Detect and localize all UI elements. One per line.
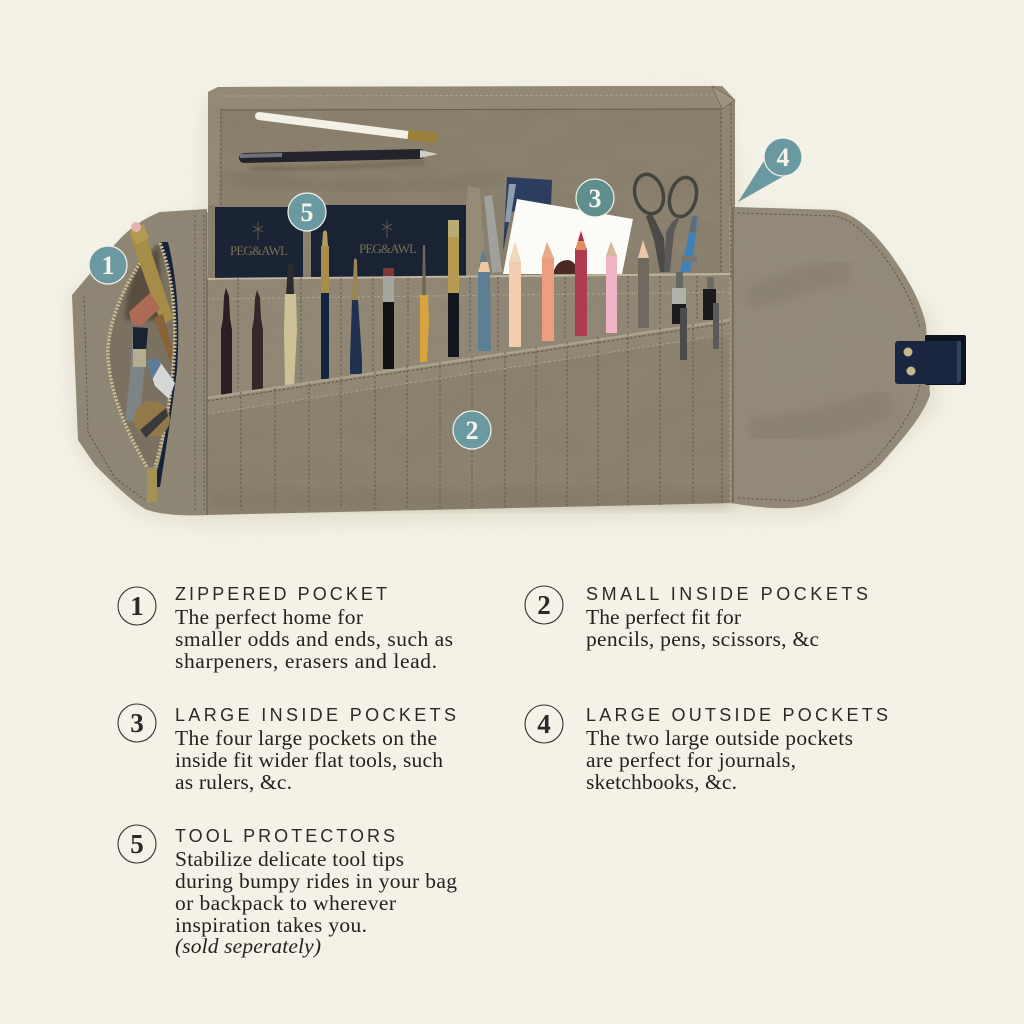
zipper pocket contents bbox=[125, 222, 175, 438]
legend item 2: small inside pockets: 2 bbox=[537, 590, 551, 620]
callout 2 bbox=[453, 411, 491, 449]
callout 2: 2 bbox=[466, 416, 478, 445]
legend item 4: large outside pockets: sketchbooks, &c. bbox=[586, 770, 737, 794]
legend item 4: large outside pockets bbox=[525, 705, 888, 794]
tool protectors bbox=[215, 205, 466, 282]
legend item 4: large outside pockets: The two large outside pockets bbox=[586, 726, 853, 750]
mechanical pencil clips over pocket bbox=[680, 303, 719, 360]
legend item 5: tool protectors: during bumpy rides in your bag bbox=[175, 869, 457, 893]
legend item 1: zippered pocket bbox=[118, 584, 453, 673]
pens on top panel bbox=[240, 116, 438, 169]
legend item 3: large inside pockets: The four large pockets on the bbox=[175, 726, 437, 750]
legend item 5: tool protectors: (sold seperately) bbox=[175, 934, 321, 958]
legend item 2: small inside pockets bbox=[525, 584, 868, 651]
legend item 3: large inside pockets: LARGE INSIDE POCKETS bbox=[175, 705, 456, 725]
legend item 3: large inside pockets bbox=[118, 704, 456, 794]
legend item 5: tool protectors: inspiration takes you. bbox=[175, 913, 367, 937]
legend item 1: zippered pocket: ZIPPERED POCKET bbox=[175, 584, 387, 604]
callout 4 with pointer bbox=[738, 138, 802, 202]
legend item 5: tool protectors: or backpack to wherever bbox=[175, 891, 396, 915]
roll shadow bbox=[72, 94, 936, 522]
left flap with zipper bbox=[65, 205, 210, 520]
mechanical pencils bbox=[672, 272, 716, 324]
legend item 2: small inside pockets: SMALL INSIDE POCKETS bbox=[586, 584, 868, 604]
ruler and card bbox=[484, 177, 633, 274]
top panel: large inside pockets bbox=[208, 85, 736, 292]
legend item 2: small inside pockets: The perfect fit for bbox=[586, 605, 741, 629]
legend item 5: tool protectors: TOOL PROTECTORS bbox=[175, 826, 395, 846]
small pocket back panel bbox=[208, 273, 731, 397]
tool protectors: PEG&AWL bbox=[230, 243, 288, 258]
pencils bbox=[478, 231, 649, 351]
scissors and blue pen bbox=[630, 171, 701, 272]
callout 3: 3 bbox=[588, 184, 602, 213]
legend item 2: small inside pockets: pencils, pens, scissors, &c bbox=[586, 627, 819, 651]
legend item 1: zippered pocket: 1 bbox=[130, 591, 144, 621]
legend item 4: large outside pockets: 4 bbox=[537, 709, 551, 739]
callout 1: 1 bbox=[102, 251, 114, 280]
callout 5: 5 bbox=[300, 198, 314, 227]
legend item 1: zippered pocket: smaller odds and ends, such as bbox=[175, 627, 453, 651]
legend item 3: large inside pockets: as rulers, &c. bbox=[175, 770, 292, 794]
tool roll illustration bbox=[65, 80, 966, 522]
lower pockets: small inside pockets front bbox=[200, 315, 740, 520]
leather strap and rivets bbox=[895, 335, 966, 385]
legend item 1: zippered pocket: The perfect home for bbox=[175, 605, 363, 629]
legend item 4: large outside pockets: are perfect for journals, bbox=[586, 748, 796, 772]
zipper pocket opening bbox=[108, 242, 178, 502]
legend item 5: tool protectors: 5 bbox=[130, 829, 144, 859]
callout 4 with pointer: 4 bbox=[776, 143, 790, 172]
legend item 4: large outside pockets: LARGE OUTSIDE POCKETS bbox=[586, 705, 888, 725]
legend item 5: tool protectors bbox=[118, 825, 457, 958]
legend item 5: tool protectors: Stabilize delicate tool tips bbox=[175, 847, 404, 871]
legend item 1: zippered pocket: sharpeners, erasers and lead. bbox=[175, 649, 437, 673]
legend item 3: large inside pockets: 3 bbox=[130, 708, 144, 738]
legend item 3: large inside pockets: inside fit wider flat tools, such bbox=[175, 748, 443, 772]
callout 3 bbox=[576, 179, 614, 217]
callout 5 bbox=[288, 193, 326, 231]
callout 1 bbox=[89, 246, 127, 284]
brushes bbox=[221, 220, 459, 395]
right flap: large outside pocket bbox=[722, 200, 935, 515]
tool protectors: PEG&AWL bbox=[359, 241, 417, 256]
